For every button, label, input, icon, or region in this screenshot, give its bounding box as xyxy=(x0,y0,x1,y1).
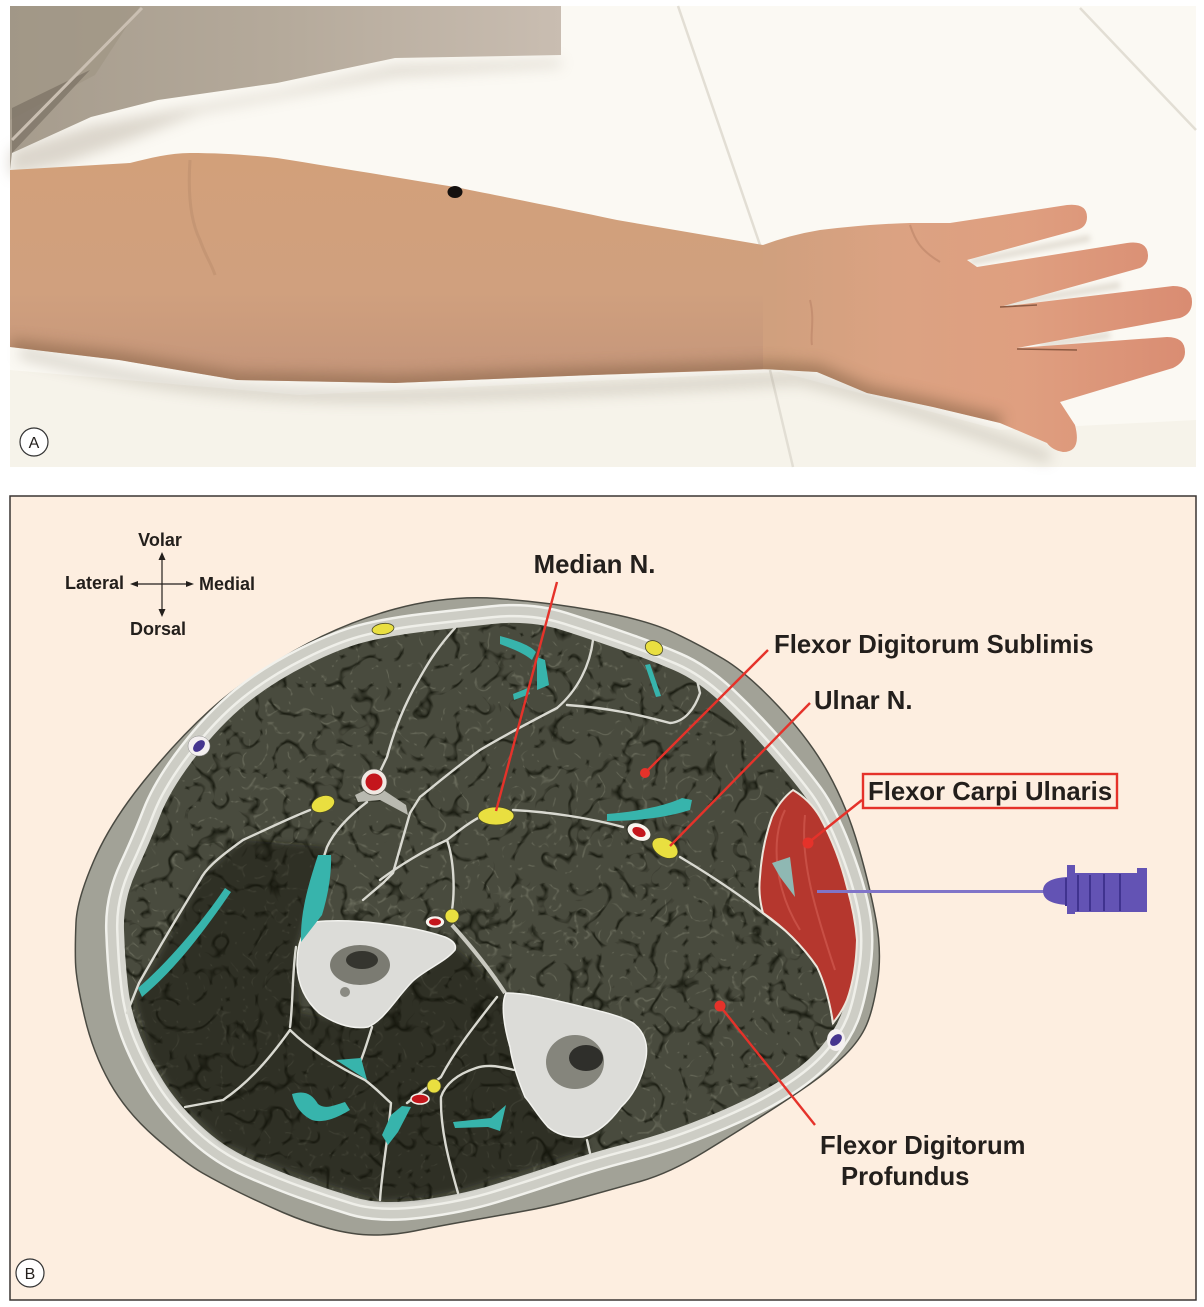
label: Flexor Digitorum Profundus xyxy=(820,1132,1026,1191)
subcutaneous layer xyxy=(124,623,855,1202)
panel A: forearm photograph xyxy=(10,6,1196,467)
label A: A xyxy=(29,435,40,452)
injection site marker xyxy=(448,186,462,198)
orientation compass: Volar xyxy=(138,530,182,550)
skin xyxy=(75,598,879,1235)
label: Median N.: Median N. xyxy=(534,551,655,579)
orientation compass xyxy=(65,530,255,639)
tendons xyxy=(138,636,692,1145)
forearm cross-section xyxy=(75,598,879,1235)
needle xyxy=(817,865,1147,914)
arteries xyxy=(361,769,653,1104)
label: Flexor Digitorum Profundus: Flexor Digitorum xyxy=(820,1132,1026,1160)
forearm and hand xyxy=(10,153,1192,452)
muscle mass xyxy=(124,623,855,1202)
radius bone xyxy=(297,921,455,1028)
label: Flexor Digitorum Sublimis: Flexor Digitorum Sublimis xyxy=(774,631,1094,659)
shirt sleeve xyxy=(10,6,561,176)
orientation compass: Lateral xyxy=(65,573,124,593)
superficial veins xyxy=(188,736,845,1051)
label: Flexor Digitorum Profundus: Profundus xyxy=(841,1163,969,1191)
label: Flexor Carpi Ulnaris (boxed): Flexor Carpi Ulnaris xyxy=(868,778,1112,806)
ulna bone xyxy=(503,993,647,1137)
deep dorsal compartments, darker xyxy=(136,840,590,1200)
interosseous membrane xyxy=(452,925,505,993)
artery junction xyxy=(355,785,408,815)
label B: B xyxy=(25,1266,35,1283)
label B xyxy=(16,1259,44,1287)
panel B: cross-section background xyxy=(10,496,1196,1300)
nerves xyxy=(309,622,682,1093)
flexor carpi ulnaris, highlighted xyxy=(759,790,857,1023)
fascial septa xyxy=(127,628,833,1200)
pointer lines xyxy=(496,582,862,1125)
label A xyxy=(20,428,48,456)
orientation compass: Dorsal xyxy=(130,619,186,639)
orientation compass: Medial xyxy=(199,574,255,594)
label: Ulnar N.: Ulnar N. xyxy=(814,687,912,715)
